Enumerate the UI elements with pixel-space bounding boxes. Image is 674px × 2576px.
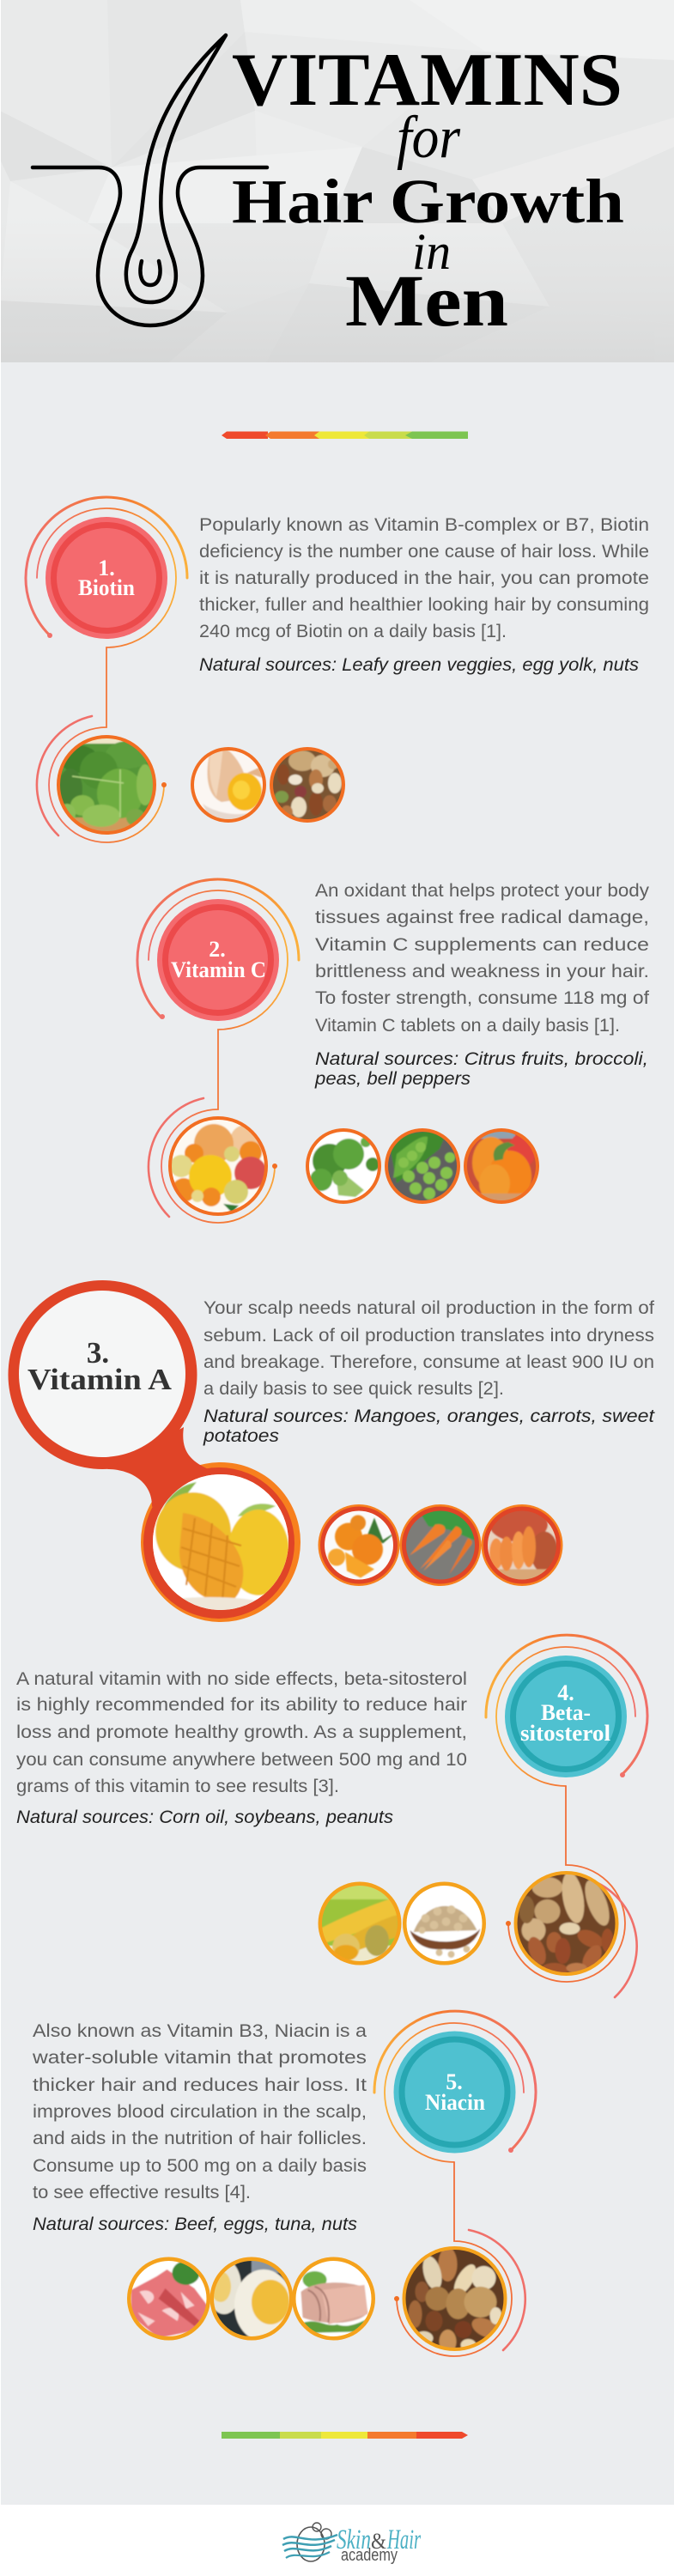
- text: Vitamin A description: Natural sources: Mangoes, oranges, carrots, sweet: [203, 1406, 655, 1426]
- icon: bubbles and waves: [282, 2523, 337, 2561]
- text: Beta-sitosterol description: A natural vitamin with no side effects, beta-sitosterol: [16, 1669, 467, 1689]
- text: Vitamin C description: [314, 881, 650, 1089]
- text: Niacin description: thicker hair and reduces hair loss. It: [33, 2075, 367, 2095]
- photo: broccoli: [306, 1128, 381, 1204]
- badge: 5 Niacin: Niacin: [425, 2090, 486, 2115]
- text: Vitamin C description: Vitamin C tablets on a daily basis [1].: [315, 1016, 620, 1036]
- connector arcs: [137, 879, 299, 1223]
- text: Vitamin A description: Your scalp needs natural oil production in the form of: [203, 1298, 654, 1318]
- title: VITAMINS: [232, 39, 622, 122]
- badge: 2 Vitamin C: [157, 899, 279, 1021]
- badge: 2 Vitamin C: Vitamin C: [171, 957, 266, 982]
- photo: oranges: [318, 1504, 400, 1586]
- text: Vitamin C description: brittleness and weakness in your hair.: [315, 962, 649, 981]
- footer logo: Skin & Hair academy: Skin: [337, 2524, 371, 2555]
- text: Vitamin C description: Natural sources: Citrus fruits, broccoli,: [315, 1049, 648, 1069]
- bottom colour bar: [222, 2432, 468, 2439]
- text: Vitamin A description: [203, 1298, 655, 1446]
- text: Biotin description: thicker, fuller and healthier looking hair by consuming: [199, 595, 649, 615]
- text: Vitamin C description: To foster strength, consume 118 mg of: [315, 988, 649, 1008]
- text: Niacin description: to see effective results [4].: [33, 2183, 251, 2202]
- footer logo: Skin & Hair academy: [282, 2523, 421, 2565]
- text: Vitamin C description: Vitamin C supplements can reduce: [315, 935, 649, 955]
- photo: corn oil: [317, 1880, 403, 1966]
- photo: tuna: [290, 2256, 376, 2342]
- photo: carrots: [400, 1504, 481, 1586]
- badge: 5 Niacin: [393, 2032, 515, 2154]
- badge: 3 Vitamin A: [19, 1291, 185, 1457]
- footer logo: Skin & Hair academy: academy: [341, 2546, 398, 2565]
- connector arcs: [26, 497, 187, 842]
- badge: 2 Vitamin C: 2.: [209, 937, 226, 962]
- panel: 3 Vitamin A: [9, 1280, 655, 1622]
- title: Hair Growth: [232, 167, 624, 236]
- badge: 1 Biotin: Biotin: [78, 575, 136, 600]
- text: Niacin description: and aids in the nutrition of hair follicles.: [33, 2129, 367, 2148]
- text: Biotin description: 240 mcg of Biotin on a daily basis [1].: [199, 622, 507, 641]
- badge: 1 Biotin: [46, 517, 167, 639]
- text: Vitamin C description: peas, bell peppers: [314, 1069, 471, 1089]
- connector arcs: [486, 1635, 647, 1997]
- photo: eggs: [207, 2256, 294, 2342]
- photo: soybeans: [402, 1880, 488, 1966]
- top colour bar: [222, 431, 468, 439]
- text: Niacin description: Also known as Vitamin B3, Niacin is a: [33, 2021, 367, 2041]
- text: Vitamin A description: sebum. Lack of oil production translates into dryness: [203, 1326, 654, 1346]
- badge: 4 Beta-sitosterol: Beta-: [541, 1700, 591, 1725]
- badge: 1 Biotin: 1.: [98, 556, 115, 580]
- photo: mango: [152, 1473, 289, 1611]
- text: Vitamin C description: An oxidant that helps protect your body: [315, 881, 650, 901]
- text: Vitamin A description: a daily basis to see quick results [2].: [203, 1379, 504, 1399]
- photo: beef: [125, 2256, 211, 2342]
- text: Niacin description: water-soluble vitamin that promotes: [32, 2048, 367, 2068]
- badge: 4 Beta-sitosterol: [505, 1656, 627, 1777]
- title: [232, 39, 624, 342]
- photo: peanuts: [513, 1870, 620, 1977]
- footer logo: Skin & Hair academy: &: [371, 2529, 386, 2554]
- badge: 5 Niacin: 5.: [446, 2069, 463, 2094]
- panel: 5 Niacin: [32, 2011, 536, 2356]
- title: Men: [345, 259, 508, 342]
- panel: 1 Biotin: [26, 497, 649, 842]
- text: Biotin description: [199, 515, 649, 675]
- badge: 4 Beta-sitosterol: 4.: [557, 1680, 574, 1705]
- text: Niacin description: improves blood circulation in the scalp,: [33, 2102, 367, 2122]
- text: Beta-sitosterol description: grams of this vitamin to see results [3].: [16, 1777, 339, 1796]
- text: Vitamin A description: and breakage. Therefore, consume at least 900 IU on: [203, 1352, 654, 1372]
- text: Niacin description: Consume up to 500 mg on a daily basis: [33, 2156, 367, 2176]
- panel: 4 Beta-sitosterol: [16, 1635, 647, 1997]
- panel: 2 Vitamin C: [137, 879, 650, 1223]
- connector blob: [9, 1280, 301, 1622]
- title: in: [412, 223, 451, 280]
- photo: bell pepper: [464, 1128, 539, 1204]
- badge: 3 Vitamin A: 3.: [87, 1336, 109, 1370]
- text: Vitamin A description: potatoes: [203, 1426, 280, 1446]
- text: Niacin description: [32, 2021, 367, 2234]
- photo: mixed nuts: [270, 747, 345, 823]
- header panel: [0, 0, 674, 362]
- icon: hair follicle: [33, 35, 267, 325]
- badge: 3 Vitamin A: Vitamin A: [27, 1363, 173, 1396]
- footer logo: Skin & Hair academy: Hair: [386, 2524, 421, 2555]
- photo: sweet potatoes: [481, 1504, 563, 1586]
- photo: peas: [385, 1128, 460, 1204]
- photo: nuts: [402, 2245, 508, 2354]
- title: for: [397, 105, 461, 171]
- text: Biotin description: deficiency is the number one cause of hair loss. While: [199, 542, 649, 562]
- badge: 4 Beta-sitosterol: sitosterol: [520, 1721, 610, 1746]
- text: Beta-sitosterol description: you can consume anywhere between 500 mg and 10: [16, 1750, 467, 1770]
- text: Beta-sitosterol description: is highly recommended for its ability to reduce hair: [16, 1695, 467, 1715]
- text: Biotin description: Natural sources: Leafy green veggies, egg yolk, nuts: [199, 655, 640, 675]
- text: Beta-sitosterol description: loss and promote healthy growth. As a supplement,: [16, 1722, 467, 1742]
- text: Beta-sitosterol description: [16, 1669, 467, 1827]
- text: Vitamin C description: tissues against free radical damage,: [315, 908, 649, 927]
- photo: egg yolk: [191, 747, 266, 823]
- connector arcs: [374, 2011, 536, 2356]
- text: Biotin description: Popularly known as Vitamin B-complex or B7, Biotin: [199, 515, 649, 535]
- text: Biotin description: it is naturally produced in the hair, you can promote: [199, 568, 649, 588]
- photo: leafy greens: [55, 733, 158, 836]
- text: Beta-sitosterol description: Natural sources: Corn oil, soybeans, peanuts: [16, 1807, 394, 1827]
- text: Niacin description: Natural sources: Beef, eggs, tuna, nuts: [33, 2215, 358, 2234]
- photo: citrus fruits: [167, 1115, 270, 1218]
